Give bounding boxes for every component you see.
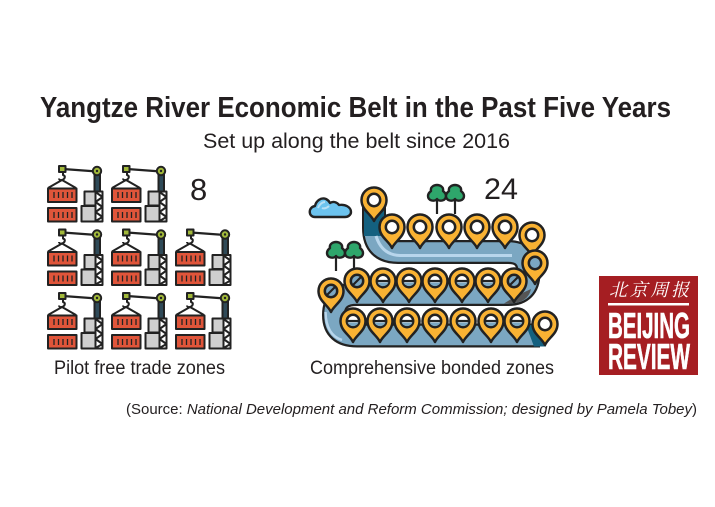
belt end mask [540, 322, 556, 347]
icon: trees on top of belt [428, 185, 464, 214]
bottom row map pins [340, 308, 558, 345]
middle row map pins [318, 268, 526, 312]
logo: Beijing Review [599, 276, 698, 377]
top row map pins [362, 188, 548, 284]
icon: trees on left of belt [327, 242, 363, 271]
icon group: pilot free trade zone cranes [48, 166, 230, 348]
label: comprehensive bonded zones: Comprehensive bonded zones [310, 358, 554, 379]
belt highlight [376, 236, 512, 256]
icon: cloud [310, 198, 351, 217]
subtitle: Set up along the belt since 2016 [203, 129, 510, 153]
number: 8: 8 [190, 172, 207, 207]
belt highlight left bend [326, 312, 342, 340]
belt end teal [526, 325, 546, 346]
belt shading: dark teal start [364, 205, 384, 236]
river belt [326, 205, 556, 347]
logo: Beijing Review: 北京周报 [609, 276, 691, 302]
label: pilot free trade zones: Pilot free trade zones [54, 358, 225, 379]
number: 24: 24 [484, 173, 518, 206]
source note: (Source: National Development and Reform Commission; designed by Pamela Tobey) [126, 401, 697, 418]
belt shadow right bend [504, 289, 531, 304]
